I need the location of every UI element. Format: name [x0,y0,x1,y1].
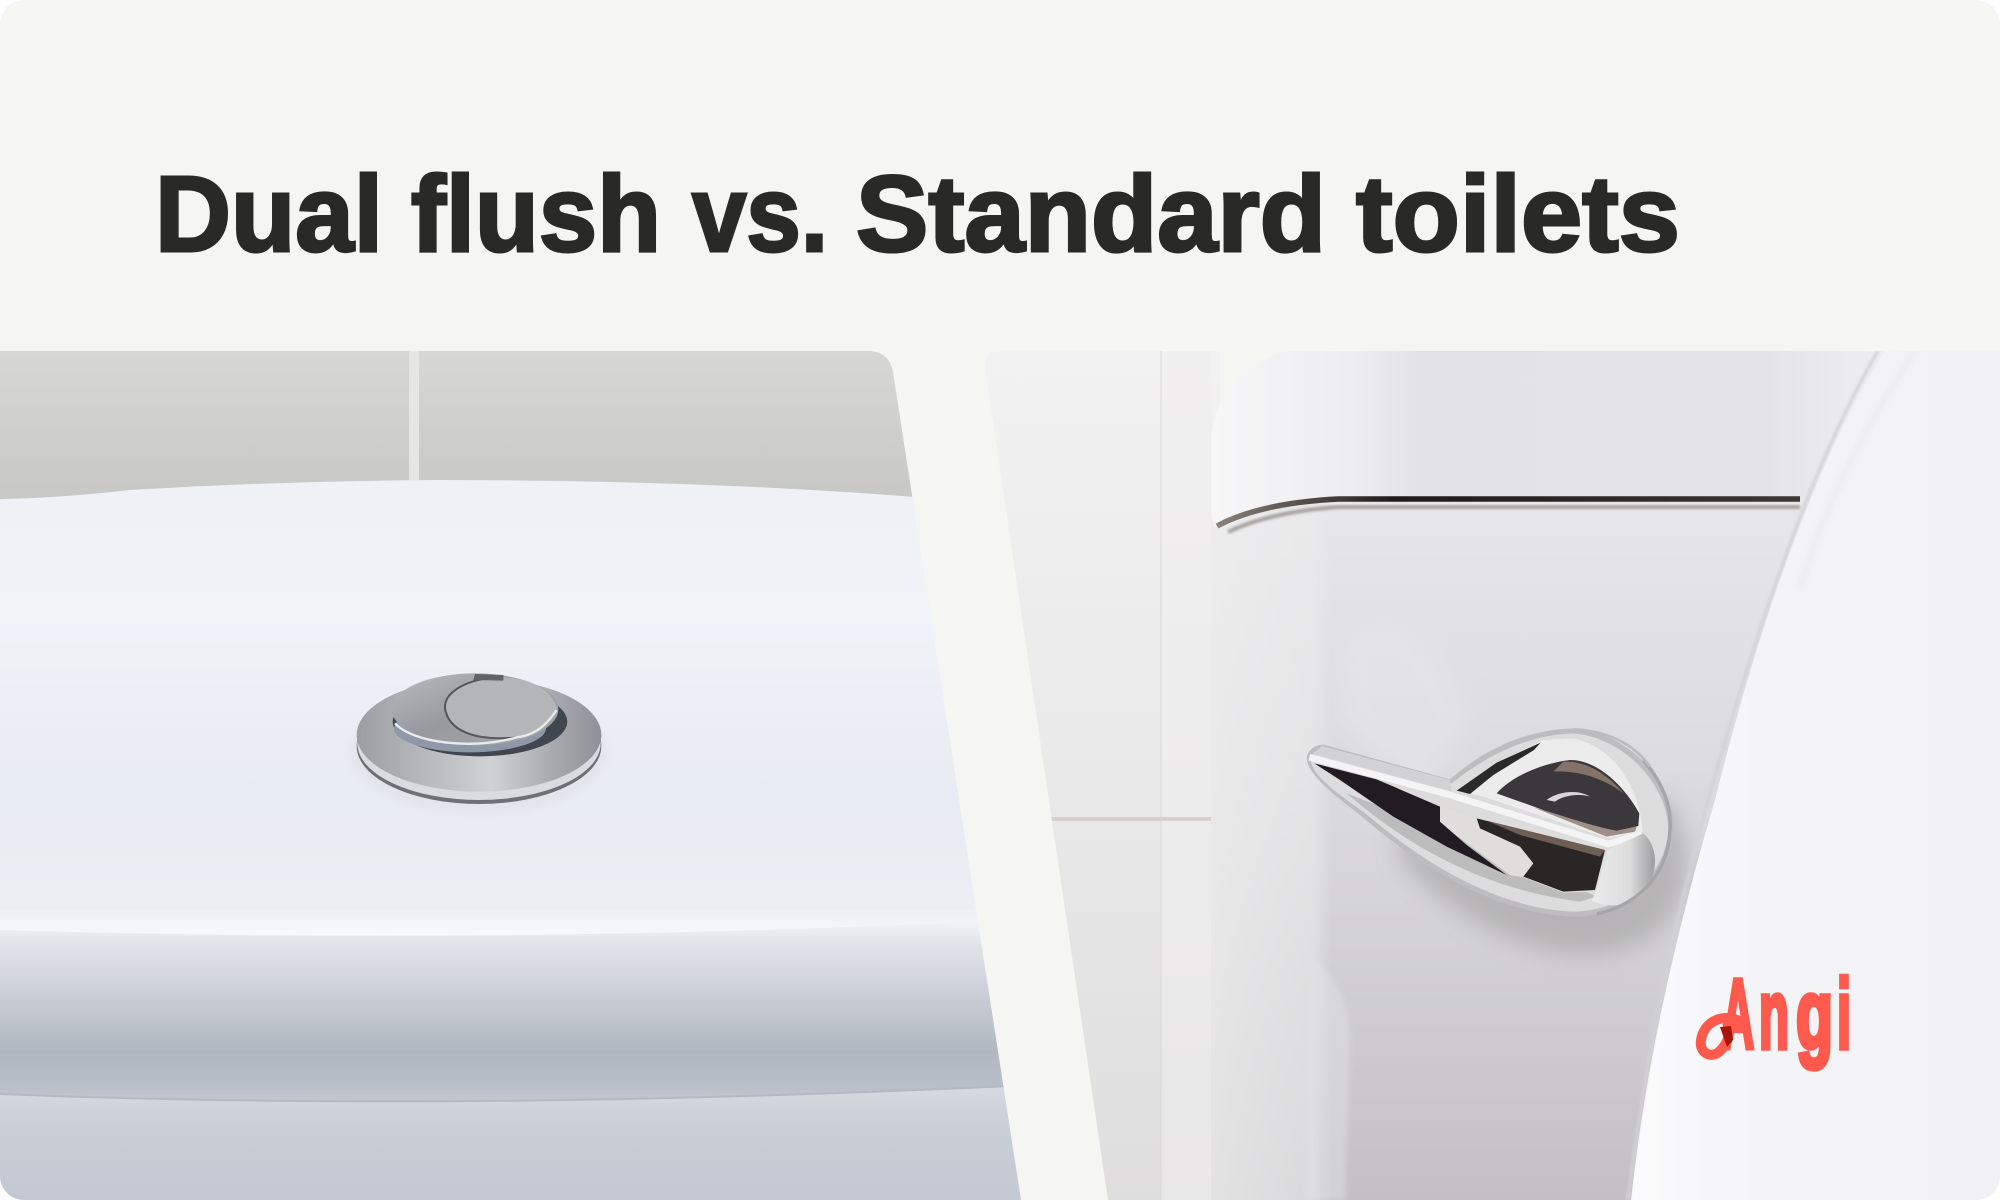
title: flush [411,153,661,274]
lever shadow [1400,800,1688,954]
tank lid [1211,351,1900,528]
title [160,172,1677,254]
lower tank [0,1086,1030,1200]
logo: Angi [1701,959,1851,1069]
title: Dual [155,153,383,274]
photo: dual flush toilet [0,351,1030,1200]
title: Standard [856,153,1326,274]
toilet seat [1631,388,1866,1200]
tiled wall [0,351,930,511]
icon: dual flush button [351,673,607,813]
lid seam [1217,499,1800,526]
tank lid top [0,480,1000,935]
logo: Angi: g [1796,959,1833,1069]
icon: chrome flush lever [1307,728,1674,917]
title: vs. [692,153,828,274]
lid front band [0,921,1030,1103]
logo: Angi: i [1837,959,1851,1069]
title: toilets [1356,153,1680,274]
logo: Angi: n [1759,959,1789,1069]
photo: standard toilet [1012,351,1908,1200]
logo: Angi: A [1722,959,1754,1069]
tank body [1211,500,1840,1200]
tiled wall [1012,544,1211,1200]
